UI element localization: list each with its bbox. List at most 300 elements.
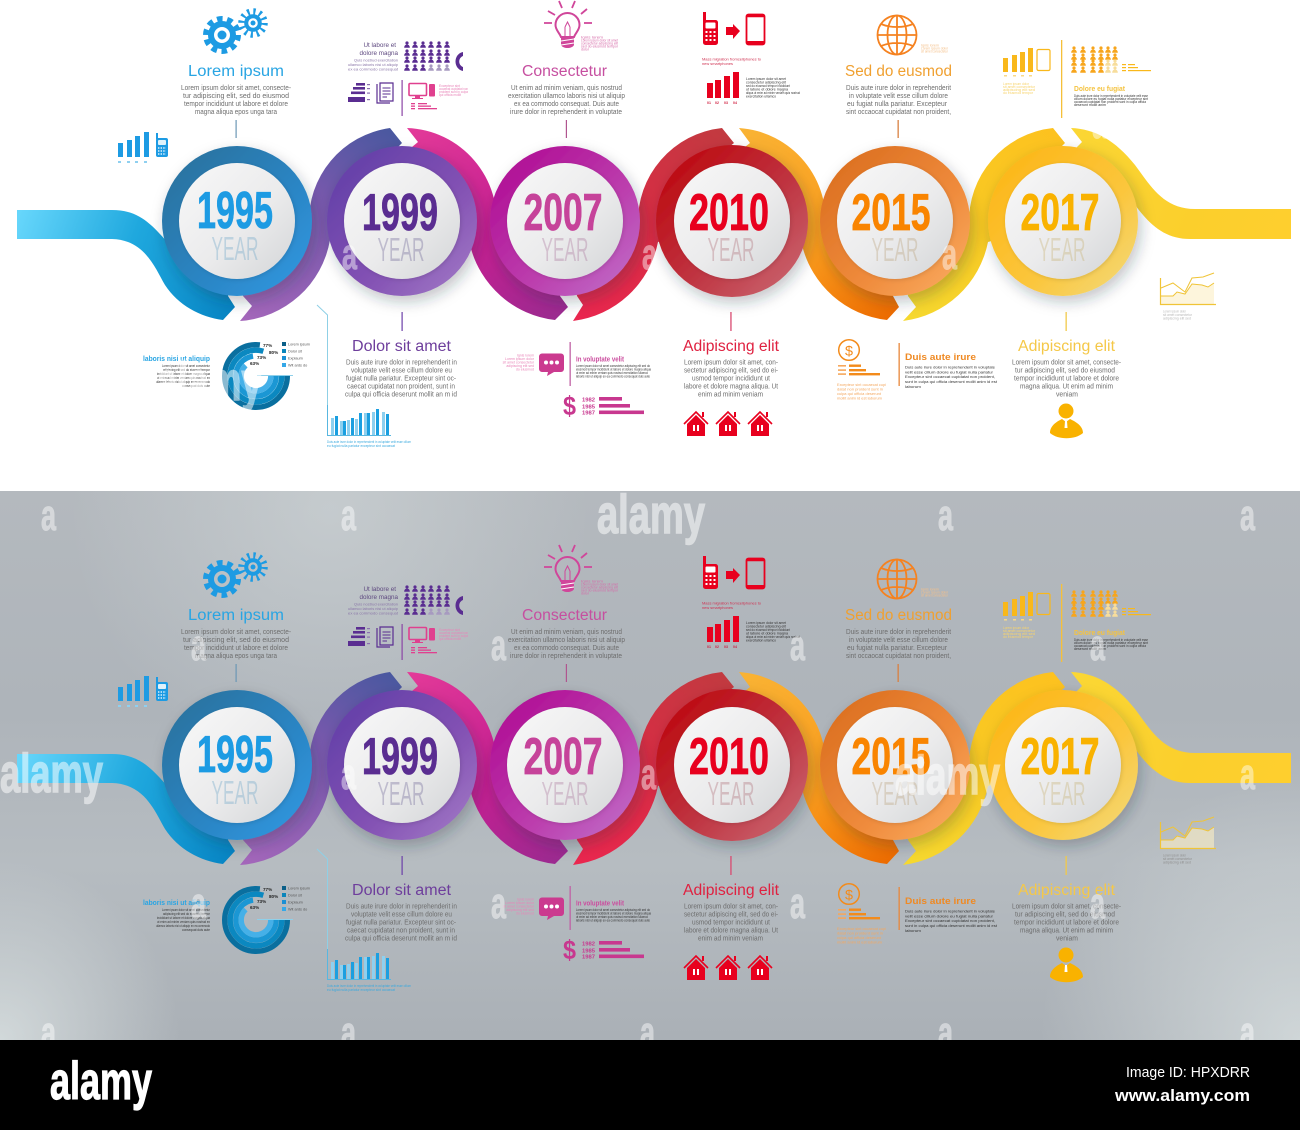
icon: old mobile phone (703, 12, 718, 45)
text: Consectetur body: irure dolor in reprehenderit in voluptate (510, 651, 622, 660)
tiny text: do eiusmod (516, 368, 534, 372)
donut percentages: 73% (257, 899, 266, 904)
large watermarks: alamy (0, 742, 103, 804)
caption: Mass migration (702, 58, 761, 66)
tiny text: adipiscing elit sed (1003, 632, 1035, 636)
year 2017 (1020, 728, 1100, 812)
tiny text: do eiusmod tempor (1003, 635, 1034, 639)
text: Sed do eusmod body: sint occaocat cupidatat non proident, (846, 651, 951, 660)
donut legend: Wit ards do (288, 364, 307, 368)
tiny text (921, 588, 949, 598)
tiny text: Excepteur sint (439, 84, 460, 88)
tiny text: occaecat cupidatat non proident sunt in culpa officia (1074, 644, 1146, 648)
bars: orange (838, 364, 880, 375)
donut legend (282, 342, 310, 368)
tiny caption (327, 984, 411, 992)
stem line (898, 664, 899, 682)
year 2007 (524, 184, 602, 268)
heading: Adipiscing elit: Adipiscing elit (683, 338, 780, 355)
bar labels: 04 (733, 101, 737, 105)
tiny text (503, 354, 535, 372)
icon: stacked bars (348, 627, 370, 646)
tiny text: sit amet consectetur (921, 594, 949, 598)
year 2010 (689, 184, 769, 268)
icon: chat bubble (539, 898, 564, 920)
text: Sed do eusmod body (846, 83, 952, 116)
donut percentages (250, 343, 278, 366)
donut percentages (250, 887, 278, 910)
tiny text: consectetur adipiscing elit (746, 80, 786, 84)
text: Dolor sit amet body: voluptate velit esse cillum dolore eu (351, 910, 452, 918)
section: Adipiscing elit red (683, 312, 780, 436)
donut legend: Lorem ipsum (288, 886, 310, 890)
caption: Mass migration: new smartphones (702, 606, 733, 610)
tiny text: datat non proident sunt in (837, 932, 883, 936)
caption: Mass migration: Mass migration fromcellphones to (702, 58, 761, 62)
tiny text: proident sunt in culpa (439, 634, 468, 638)
text: Adipiscing elit body: Lorem ipsum dolor sit amet, con- (684, 358, 778, 366)
text: Lorem ipsum body (181, 627, 291, 660)
grey timeline content (17, 545, 1291, 992)
text: Sed do eusmod body: in voluptate velit esse cillum dolore (849, 635, 948, 644)
tiny text: sit amet consectetur (503, 904, 535, 908)
section: Lorem ipsum (118, 556, 291, 707)
watermark letters on the ribbon: a (1092, 99, 1107, 148)
text: donut note: ut enim ad minim veniam quis nostrud ex (157, 376, 210, 380)
icon: document (377, 83, 393, 103)
text: Consectetur body: irure dolor in reprehenderit in voluptate (510, 107, 622, 116)
section: phone migration (702, 12, 800, 105)
icon: bars and tablet (1003, 592, 1050, 620)
text: donut note: ullamco laboris nisi ut aliquip ex ea commodo (156, 380, 210, 384)
donut percentages: 80% (269, 894, 278, 899)
text: donut note: consequat duis aute (182, 928, 210, 932)
text: Adipiscing elit body: labore et dolore magna aliqua. Ut (684, 926, 779, 934)
tiny text: laboris nisi ut aliquip ex ea commodo consequat duis aute (576, 374, 650, 378)
tiny text: Lorem ipsum dolor sit amet (581, 38, 618, 42)
tiny text: sed do eiusmod tempor incididunt (746, 84, 790, 88)
bars: 1982 1985 1987: 1982 (582, 942, 595, 948)
donut legend: Dolor sit (288, 894, 303, 898)
heading: Adipiscing elit: Adipiscing elit (1018, 338, 1116, 355)
divider line (898, 343, 900, 386)
heading: In voluptate velit: In voluptate velit (576, 354, 624, 364)
donut legend (282, 886, 310, 912)
watermark letters: a (938, 1008, 953, 1057)
tiny text: Duis aute irure dolor in reprehenderit in voluptate velit esse (1074, 94, 1148, 98)
donut legend: Lorem ipsum (288, 342, 310, 346)
donut legend: Explaum (288, 900, 303, 904)
line chart (1160, 273, 1216, 304)
icon: people grid and handset (404, 585, 463, 615)
bar chart: red (707, 72, 739, 98)
icon: business person (1050, 404, 1083, 438)
year 1995 (197, 726, 273, 811)
heading: In voluptate velit: In voluptate velit (576, 898, 624, 908)
year 2015: YEAR (872, 775, 918, 812)
text: Adipiscing elit body (1012, 902, 1121, 942)
icon: arrow (726, 24, 740, 39)
heading: Lorem ipsum: Lorem ipsum (188, 607, 284, 624)
tiny text (348, 58, 398, 72)
large watermarks (0, 483, 1000, 806)
tiny text: sunt in culpa qui officia deserunt mollit anim id est (905, 380, 997, 384)
tiny text (348, 602, 398, 616)
tiny text (921, 44, 949, 54)
tiny text: sed do eiusmod tempor (581, 44, 619, 48)
watermark letters: a (491, 879, 506, 928)
text: Lorem ipsum body: Lorem ipsum dolor sit amet, consecte- (181, 83, 291, 92)
year 1999 (362, 728, 438, 812)
tiny text: sed do eiusmod tempor (581, 588, 619, 592)
tiny text: Lorem ipsum dolor sit amet (746, 77, 786, 81)
tiny text: Lorem ipsum dolor sit amet consectetur adipiscing elit sed do (576, 364, 650, 368)
year 1995: YEAR (212, 774, 258, 811)
bar chart (328, 405, 391, 436)
divider line (1061, 584, 1062, 662)
tiny text: Lorem ipsum dolor (921, 590, 949, 594)
year 2015 (852, 184, 930, 268)
text: Sed do eusmod body: in voluptate velit esse cillum dolore (849, 91, 948, 100)
text: Adipiscing elit body: usmod tempor incididunt ut (692, 918, 771, 926)
tiny text: Lorem ipsum dolor (1163, 310, 1187, 314)
year 2010: YEAR (708, 775, 754, 812)
text: Adipiscing elit body: sectetur adipiscing elit, sed do ei- (684, 910, 778, 918)
text: Adipiscing elit body: magna aliqua. Ut enim ad minim (1020, 382, 1113, 390)
tiny text: Lorem ipsum dolor (1163, 854, 1187, 858)
tiny text: sed do eiusmod tempor incididunt (746, 628, 790, 632)
large watermarks: alamy (895, 744, 1000, 806)
tiny text: Duis aute irure dolor in reprehenderit in voluptate (905, 910, 995, 914)
tiny text: Ignis lorem (581, 36, 603, 40)
year 2015: YEAR (872, 231, 918, 268)
tiny text (581, 36, 619, 52)
tiny text: Lorem ipsum dolor sit amet (746, 621, 786, 625)
text: Lorem ipsum body: tempor incididunt ut labore et dolore (184, 99, 288, 108)
tiny text: dolor (581, 48, 590, 52)
callout line to bar chart (317, 849, 328, 949)
text: Lorem ipsum body (181, 83, 291, 116)
tiny text: Lorem ipsum dolor (1003, 626, 1030, 630)
text: Adipiscing elit body: tur adipiscing elit, sed do eiusmod (1015, 366, 1115, 374)
watermark letters: a (1240, 750, 1255, 799)
stem line (402, 856, 403, 875)
tiny caption: Duis aute irure dolor in reprehenderit in voluptate velit esse cillum (327, 440, 411, 444)
text: Dolor sit amet body: caecat cupidatat non proident, sunt in (347, 926, 455, 934)
heading: Duis aute irure: Duis aute irure (905, 352, 976, 362)
icon: dollar coin (839, 340, 859, 360)
section: Duis aute irure (837, 340, 997, 400)
tiny text (576, 364, 651, 378)
icon: dollar sign: $ (563, 391, 576, 421)
section: Sed do eusmod (845, 16, 952, 138)
tiny text: ex ea commodo consequat (348, 612, 398, 616)
icon: signal bars and phone (118, 132, 168, 163)
tiny text: Excepteur sint occaecat cupi (837, 927, 886, 931)
section: donut chart (143, 886, 310, 951)
stem line (730, 856, 732, 875)
alamy watermark on donut: alamy (157, 350, 262, 412)
text: Dolor sit amet body (345, 358, 457, 398)
bar labels: 03 (724, 645, 728, 649)
text: Consectetur body (508, 83, 625, 116)
section: Consectetur (508, 1, 625, 138)
icons: three houses (684, 412, 772, 436)
text: Adipiscing elit body: Lorem ipsum dolor sit amet, con- (684, 902, 778, 910)
stem line (236, 120, 237, 138)
heading: laboris nisi ut aliquip: laboris nisi ut aliquip (143, 354, 210, 363)
tiny text: Lorem ipsum dolor (1003, 82, 1030, 86)
text: Adipiscing elit body: enim ad minim veniam (698, 934, 763, 942)
text: Adipiscing elit body: magna aliqua. Ut enim ad minim (1020, 926, 1113, 934)
caption: Mass migration (702, 602, 761, 610)
heading: Lorem ipsum: Lorem ipsum (188, 63, 284, 80)
text: donut note: incididunt ut labore et dolore magna aliqua (157, 916, 210, 920)
tiny text: Excepteur sint occaecat cupi (837, 383, 886, 387)
tiny text (905, 910, 997, 933)
heading: Ut labore et: Ut labore et (363, 586, 396, 593)
year 1999: YEAR (378, 231, 424, 268)
donut chart (225, 889, 293, 951)
bar labels (707, 645, 737, 649)
text: Adipiscing elit body (684, 902, 779, 942)
tiny text (1074, 94, 1148, 107)
tiny text: dolor (581, 592, 590, 596)
text: Lorem ipsum body: Lorem ipsum dolor sit amet, consecte- (181, 627, 291, 636)
text: Lorem ipsum body: magna aliqua epos unga tara (195, 107, 278, 116)
stem line (566, 664, 567, 682)
tiny text: proident sunt in culpa (439, 90, 468, 94)
divider line (898, 887, 900, 930)
tiny text (746, 77, 800, 98)
heading: Adipiscing elit: Adipiscing elit (1018, 882, 1116, 899)
text: donut note: consequat duis aute (182, 384, 210, 388)
tiny text: Lorem ipsum dolor (505, 901, 535, 905)
section: Dolor sit amet (317, 305, 457, 448)
text: Lorem ipsum body: tur adipiscing elit, sed do eiusmod (183, 635, 289, 644)
heading: laboris nisi ut aliquip: laboris nisi ut aliquip (143, 898, 210, 907)
tiny text: deserunt mollit anim (1074, 103, 1106, 107)
heading: Dolor sit amet: Dolor sit amet (352, 338, 452, 355)
image id: Image ID: HPXDRR (1126, 1064, 1250, 1081)
year 2015: 2015 (852, 728, 930, 786)
icon: people grid (1071, 590, 1151, 617)
text: donut note: incididunt ut labore et dolore magna aliqua (157, 372, 210, 376)
tiny text: consectetur adipiscing elit (581, 42, 618, 46)
text: Dolor sit amet body (345, 902, 457, 942)
icon: signal bars and phone (118, 676, 168, 707)
text: Dolor sit amet body: caecat cupidatat non proident, sunt in (347, 382, 455, 390)
text: donut note (156, 908, 211, 932)
tiny text: exercitation ullamco (746, 94, 776, 98)
line chart (1160, 817, 1216, 848)
tiny text: qui officia mollit (439, 637, 461, 641)
tiny text: eiusmod tempor incididunt ut labore et dolore magna aliqua (576, 912, 651, 916)
watermark letters: a (640, 1008, 655, 1057)
text: Consectetur body: ex ea commodo consequat. Duis aute (514, 99, 619, 108)
tiny text (905, 366, 997, 389)
tiny text: occaecat cupidatat non proident sunt in culpa officia (1074, 100, 1146, 104)
watermark letters: a (1090, 879, 1105, 928)
text: Adipiscing elit body (1012, 358, 1121, 398)
tiny text (1003, 626, 1036, 639)
tiny text: deserunt mollit anim (1074, 647, 1106, 651)
icon: dollar sign: $ (563, 935, 576, 965)
icon: light bulb (544, 545, 592, 592)
tiny text: Excepteur sint occaecat cupidatat non proident, (905, 375, 995, 379)
tiny text: culpa qui officia deserunt (837, 392, 881, 396)
watermark letters on the ribbon: a (942, 230, 957, 279)
icon: people grid (1071, 46, 1151, 73)
watermark letters: a (1090, 621, 1105, 670)
tiny text: velit esse cillum dolore eu fugiat nulla pariatur (905, 914, 994, 918)
tiny text: do eiusmod (516, 912, 534, 916)
text: Dolor sit amet body: culpa qui officia deserunt mollit an m id (345, 934, 457, 942)
heading: Adipiscing elit: Adipiscing elit (683, 882, 780, 899)
text: Adipiscing elit body: labore et dolore magna aliqua. Ut (684, 382, 779, 390)
tiny text: do eiusmod tempor (1003, 91, 1034, 95)
bar labels: 04 (733, 645, 737, 649)
tiny text: mollit anim id est laborum (837, 396, 882, 400)
tiny text: sit amet consectetur (1003, 85, 1036, 89)
section: Lorem ipsum (118, 12, 291, 163)
text: Adipiscing elit body: tempor incididunt ut labore et dolore (1014, 374, 1119, 382)
year 1995: 1995 (197, 726, 273, 784)
text: donut note: adipiscing elit sed do eiusmod tempor (163, 368, 211, 372)
text: Adipiscing elit body: Lorem ipsum dolor sit amet, consecte- (1012, 358, 1121, 366)
tiny text: culpa qui officia deserunt (837, 936, 881, 940)
tiny text: ut labore et dolore magna (746, 88, 788, 92)
tiny text: laborum (905, 929, 921, 933)
year 2007: YEAR (542, 775, 588, 812)
section: Adipiscing elit red (683, 856, 780, 980)
donut legend: Dolor sit (288, 350, 303, 354)
stem line (1066, 312, 1067, 331)
watermark letters on the ribbon: a (642, 230, 657, 279)
text: donut note (156, 364, 211, 388)
icons: three houses (684, 956, 772, 980)
icon: arrow (726, 568, 740, 583)
text: Dolor sit amet body: Duis aute irure dolor in reprehenderit in (346, 358, 457, 366)
text: Dolor sit amet body: Duis aute irure dolor in reprehenderit in (346, 902, 457, 910)
tiny text: Duis aute irure dolor in reprehenderit in voluptate (905, 366, 995, 370)
tiny text: adipiscing elit sed (1163, 316, 1191, 320)
tiny text (837, 383, 886, 400)
text: Consectetur body: exercitation ullamco laboris nisi ut aliquip (508, 91, 625, 100)
tiny text: Excepteur sint (439, 628, 460, 632)
tiny text: eiusmod tempor incididunt ut labore et dolore magna aliqua (576, 368, 651, 372)
tiny text: Quis nostrud exercitation (354, 602, 398, 606)
tiny text: sit amet consectetur (503, 360, 535, 364)
text: Dolor sit amet body: culpa qui officia deserunt mollit an m id (345, 390, 457, 398)
icon: chat bubble (539, 354, 564, 376)
watermark letters: a (938, 491, 953, 540)
heading: Ut labore et (359, 586, 398, 601)
section: Duis aute irure (837, 884, 997, 944)
year 2015: 2015 (852, 184, 930, 242)
panel: grey timeline (0, 483, 1300, 1057)
tiny text (1074, 638, 1148, 651)
watermark letters: a (41, 491, 56, 540)
tiny text: adipiscing elit sed (506, 908, 534, 912)
divider line (570, 886, 571, 930)
text: Sed do eusmod body: eu fugiat nulla pariatur. Excepteur (847, 643, 947, 652)
icon: people grid and handset (404, 41, 463, 71)
bar labels: 01 (707, 645, 711, 649)
bar labels: 02 (715, 101, 719, 105)
text: donut note: Lorem ipsum dolor sit amet consectetur (162, 908, 211, 912)
section: Adipiscing elit yellow (1012, 817, 1216, 982)
icon: bars and tablet (1003, 48, 1050, 76)
text: donut note: adipiscing elit sed do eiusmod tempor (163, 912, 211, 916)
section: In voluptate velit (503, 342, 651, 421)
watermark letters: a (191, 879, 206, 928)
section: In voluptate velit (503, 886, 651, 965)
tiny text: adipiscing elit sed (506, 364, 534, 368)
donut percentages: 77% (263, 343, 272, 348)
heading: Dolor sit amet: Dolor sit amet (352, 882, 452, 899)
bar labels: 02 (715, 645, 719, 649)
tiny text (576, 908, 651, 922)
text: Adipiscing elit body: sectetur adipiscing elit, sed do ei- (684, 366, 778, 374)
tiny text (1003, 82, 1036, 95)
heading: Ut labore et (359, 42, 398, 57)
tiny text: Ignis lorem (921, 588, 939, 592)
tiny text: laborum (905, 385, 921, 389)
icon: computer (409, 84, 437, 109)
tiny text: mollit anim id est laborum (837, 940, 882, 944)
text: Sed do eusmod body (846, 627, 952, 660)
caption: Mass migration: Mass migration fromcellphones to (702, 602, 761, 606)
tiny text: Excepteur sint occaecat cupidatat non proident, (905, 919, 995, 923)
text: Sed do eusmod body: Duis aute irure dolor in reprehenderit (846, 83, 952, 92)
donut percentages: 63% (250, 361, 259, 366)
heading: Dolore eu fugiat: Dolore eu fugiat (1074, 84, 1125, 93)
divider line (402, 624, 403, 660)
section: Adipiscing elit yellow (1012, 273, 1216, 438)
tiny text: Lorem ipsum dolor (505, 357, 535, 361)
section: Dolore eu fugiat (1003, 40, 1151, 118)
divider line (1061, 40, 1062, 118)
year 2007: 2007 (524, 184, 602, 242)
text: Adipiscing elit body (684, 358, 779, 398)
text: Lorem ipsum body: tur adipiscing elit, sed do eiusmod (183, 91, 289, 100)
icon: computer (409, 628, 437, 653)
tiny text: ullamco laboris nisi ut aliquip (348, 607, 398, 611)
donut percentages: 73% (257, 355, 266, 360)
year 2010 (689, 728, 769, 812)
bars: orange (838, 908, 880, 919)
tiny text: Ignis lorem (517, 898, 534, 902)
watermark letters: a (41, 1008, 56, 1057)
tiny text (837, 927, 886, 944)
ribbon: arrows connecting milestones (17, 128, 1291, 321)
year 2007: 2007 (524, 728, 602, 786)
section: phone migration (702, 556, 800, 649)
icon: stacked bars (348, 83, 370, 102)
section: Dolore eu fugiat (1003, 584, 1151, 662)
year 1999 (362, 184, 438, 268)
grey background (0, 491, 1300, 1040)
year 2010: 2010 (689, 728, 769, 786)
icon: dollar coin (839, 884, 859, 904)
text: Dolor sit amet body: fugiat nulla pariatur. Excepteur sint oc- (346, 374, 456, 382)
text: donut note: ullamco laboris nisi ut aliquip ex ea commodo (156, 924, 210, 928)
text: Dolor sit amet body: voluptate velit esse cillum dolore eu (351, 366, 452, 374)
text: Adipiscing elit body: enim ad minim veniam (698, 390, 763, 398)
tiny text: ullamco laboris nisi ut aliquip (348, 63, 398, 67)
tiny text: ut enim ad minim veniam quis nostrud exercitation ullamco (576, 371, 648, 375)
